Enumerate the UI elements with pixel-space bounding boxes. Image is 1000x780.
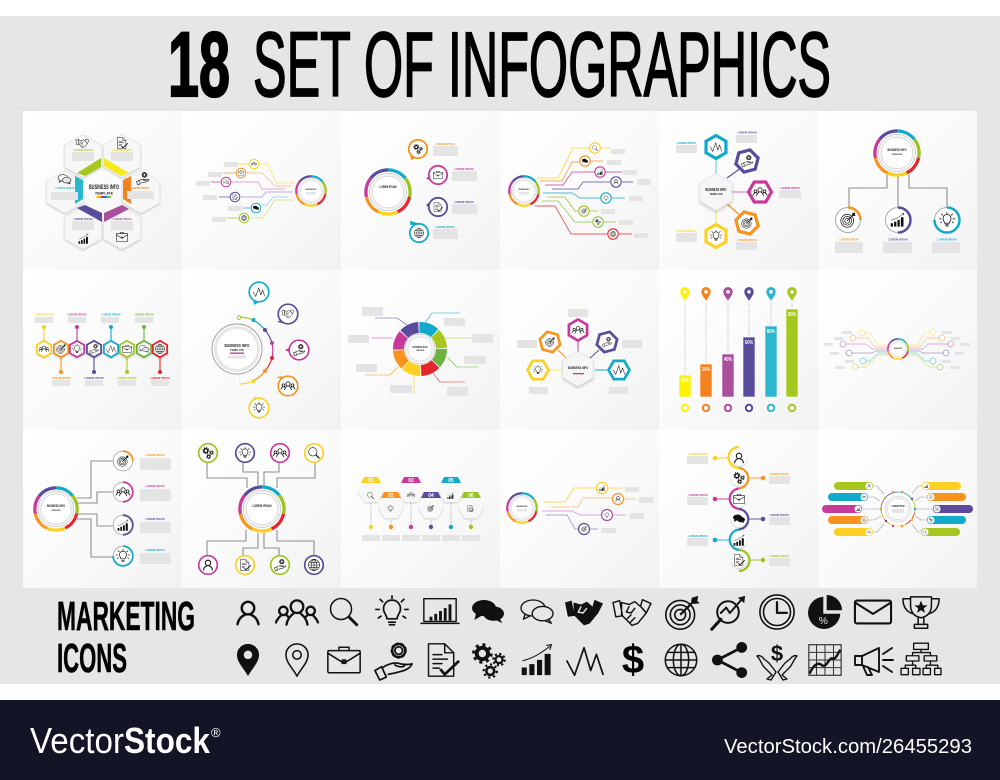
outer hexagons bbox=[706, 136, 774, 248]
small nodes bbox=[840, 329, 954, 370]
bubble icons bbox=[414, 144, 443, 238]
labels: LOREM IPSUM bbox=[146, 453, 165, 457]
centre title bbox=[568, 366, 588, 374]
labels: LOREM IPSUM bbox=[738, 238, 757, 242]
icon row: bottom: $ bbox=[622, 638, 644, 682]
donut centre: BUSINESS INFO bbox=[412, 345, 428, 349]
labels: LOREM IPSUM bbox=[781, 186, 800, 190]
big ring bbox=[875, 131, 919, 175]
labels: LOREM IPSUM bbox=[677, 141, 696, 145]
node icons bbox=[581, 485, 620, 532]
text blocks bbox=[824, 331, 970, 369]
labels: LOREM IPSUM bbox=[35, 312, 54, 316]
centre title bbox=[706, 187, 727, 196]
nodes bbox=[579, 143, 621, 239]
labels: LOREM IPSUM bbox=[889, 238, 908, 242]
labels: LOREM IPSUM bbox=[677, 229, 696, 233]
panel: hexagon hub with five spokes bbox=[659, 111, 818, 270]
panel: numbered hexagons bbox=[341, 430, 500, 588]
hexagons bbox=[355, 474, 487, 524]
panel: mirrored tech lines bbox=[818, 270, 977, 430]
spokes bbox=[550, 342, 608, 370]
big ring bbox=[509, 176, 539, 206]
labels: LOREM IPSUM bbox=[455, 200, 474, 204]
labels: LOREM IPSUM bbox=[52, 376, 71, 380]
labels: LOREM IPSUM bbox=[135, 312, 154, 316]
grey connectors bbox=[849, 174, 947, 207]
centre hexagon bbox=[563, 352, 593, 386]
segmented arc bbox=[239, 317, 273, 384]
step numbers: 01 bbox=[368, 478, 374, 484]
hexagon icons bbox=[367, 492, 474, 512]
labels bbox=[35, 312, 170, 386]
labels bbox=[140, 453, 171, 564]
big ring with dots bbox=[880, 491, 916, 527]
bottom dots bbox=[369, 525, 473, 529]
big ring bbox=[35, 488, 77, 530]
footer logo: Stock bbox=[124, 720, 211, 761]
labels bbox=[676, 130, 801, 250]
labels: LOREM IPSUM bbox=[146, 548, 165, 552]
hexagon text: LOREM IPSUM bbox=[74, 217, 93, 221]
dotted stems bbox=[371, 503, 471, 527]
donut segments bbox=[398, 328, 442, 370]
labels: LOREM IPSUM bbox=[151, 376, 170, 380]
step numbers: 03 bbox=[408, 478, 414, 484]
outer hexagons bbox=[525, 320, 632, 384]
node icons bbox=[116, 455, 130, 561]
spokes bbox=[716, 155, 750, 228]
panel: tech lines to ring, right side bbox=[182, 111, 341, 270]
panel: hexagon hub fan bbox=[500, 270, 659, 430]
nodes bbox=[221, 159, 261, 223]
stem dots bbox=[713, 456, 765, 562]
labels: LOREM IPSUM bbox=[738, 130, 757, 134]
panel: tech lines to ring, left side bbox=[500, 111, 659, 270]
bar values: 40% bbox=[724, 357, 732, 363]
hexagon text: LOREM IPSUM bbox=[113, 217, 132, 221]
pins bbox=[680, 287, 797, 301]
hexagon text: LOREM IPSUM bbox=[74, 148, 93, 152]
labels: LOREM IPSUM bbox=[102, 312, 121, 316]
connector lines bbox=[846, 332, 948, 367]
step numbers: 06 bbox=[468, 493, 474, 499]
left pills bbox=[822, 482, 873, 536]
donut centre bbox=[405, 334, 435, 364]
progress nodes bbox=[836, 208, 960, 232]
hexagon text bbox=[51, 148, 154, 230]
ring title: BUSINESS INFO bbox=[47, 504, 65, 508]
footer bar bbox=[0, 700, 1000, 780]
connector lines bbox=[542, 488, 636, 529]
grey connectors bbox=[862, 486, 933, 532]
labels: LOREM IPSUM bbox=[689, 493, 708, 497]
labels: LOREM IPSUM bbox=[118, 376, 137, 380]
connector lines bbox=[535, 148, 633, 234]
centre title: TEMPLATE bbox=[230, 348, 244, 352]
text blocks bbox=[362, 535, 480, 541]
big ring with dots: LOREM IPSUM bbox=[892, 505, 904, 508]
text blocks bbox=[196, 162, 242, 222]
labels: LOREM IPSUM bbox=[436, 142, 455, 146]
panel: ring with progress rows bbox=[23, 430, 182, 588]
labels: LOREM IPSUM bbox=[689, 452, 708, 456]
white icon discs bbox=[731, 450, 747, 568]
labels: LOREM IPSUM bbox=[455, 167, 474, 171]
centre title: BUSINESS INFO bbox=[706, 187, 727, 192]
target dots bbox=[682, 405, 795, 411]
centre title: TEMPLATE bbox=[710, 192, 723, 196]
hexagon text: LOREM IPSUM bbox=[56, 186, 75, 190]
footer id: VectorStock.com/26455293 bbox=[724, 736, 972, 758]
ring title: BUSINESS INFO bbox=[888, 148, 907, 152]
big ring bbox=[296, 176, 326, 206]
step numbers: 04 bbox=[428, 493, 434, 499]
grey connectors bbox=[77, 461, 113, 557]
six white hexagons bbox=[46, 134, 160, 250]
progress nodes bbox=[113, 451, 133, 566]
labels: LOREM IPSUM bbox=[689, 534, 708, 538]
ring label: LOREM IPSUM bbox=[380, 185, 397, 189]
text blocks bbox=[601, 149, 651, 238]
pill discs bbox=[854, 482, 941, 536]
big ring bbox=[240, 487, 284, 531]
centre title: BUSINESS INFO bbox=[568, 366, 588, 370]
step numbers bbox=[368, 478, 474, 499]
heading: marketing icons bbox=[57, 593, 195, 681]
nodes bbox=[199, 444, 323, 574]
panel: bar chart with pins bbox=[659, 270, 818, 430]
node icons bbox=[841, 212, 955, 227]
centre title: BUSINESS INFO bbox=[89, 185, 119, 191]
labels: LOREM IPSUM bbox=[770, 472, 789, 476]
bubbles bbox=[409, 140, 447, 242]
big ring bbox=[366, 170, 410, 214]
labels: LOREM IPSUM bbox=[770, 513, 789, 517]
right pills bbox=[921, 482, 973, 536]
footer logo: Vector bbox=[30, 720, 124, 761]
nodes bbox=[578, 482, 624, 534]
panel: hexagon cycle bbox=[23, 111, 182, 270]
icon row: bottom bbox=[237, 638, 941, 682]
ring title bbox=[518, 189, 530, 194]
centre title: TEMPLATE bbox=[95, 192, 114, 196]
panel: segmented donut bbox=[341, 270, 500, 430]
ring title bbox=[306, 189, 317, 194]
bubble icons bbox=[253, 288, 305, 412]
dotted leader lines bbox=[685, 302, 792, 375]
text blocks bbox=[601, 487, 653, 533]
labels bbox=[433, 142, 477, 239]
heading: marketing icons: ICONS bbox=[57, 635, 127, 681]
panel: ring with four bubbles bbox=[341, 111, 500, 270]
hexagon text: LOREM IPSUM bbox=[113, 148, 132, 152]
ring title bbox=[888, 148, 907, 156]
text blocks bbox=[348, 307, 493, 396]
hexagon text: LOREM IPSUM bbox=[131, 186, 150, 190]
bubbles bbox=[249, 282, 309, 418]
panel: serpentine timeline bbox=[659, 430, 818, 588]
panel: ring with coloured pills bbox=[818, 430, 977, 588]
labels: LOREM IPSUM bbox=[840, 238, 859, 242]
panel: hub with eight nodes bbox=[182, 430, 341, 588]
labels: LOREM IPSUM bbox=[85, 376, 104, 380]
labels: LOREM IPSUM bbox=[68, 312, 87, 316]
connector lines bbox=[211, 164, 295, 218]
ring title: BUSINESS INFO bbox=[516, 506, 528, 508]
step numbers: 02 bbox=[388, 493, 394, 499]
ring title bbox=[516, 506, 528, 512]
centre ring bbox=[888, 339, 908, 359]
panel: hexagon timeline bbox=[23, 270, 182, 430]
labels bbox=[835, 238, 960, 253]
ring title bbox=[47, 504, 65, 512]
stem dots bbox=[42, 325, 162, 374]
coloured step bands bbox=[75, 158, 131, 222]
bar values: 60% bbox=[745, 340, 753, 346]
labels: LOREM IPSUM bbox=[938, 238, 957, 242]
panel: org ring with three nodes bbox=[818, 111, 977, 270]
centre title: BUSINESS INFO bbox=[224, 343, 250, 348]
centre title bbox=[89, 185, 119, 198]
footer logo bbox=[30, 720, 221, 761]
ring title: BUSINESS INFO bbox=[518, 189, 530, 191]
centre hexagon bbox=[700, 174, 732, 210]
hexagon icons bbox=[39, 344, 165, 354]
panel: ring with four lines bbox=[500, 430, 659, 588]
ring title: BUSINESS INFO bbox=[894, 348, 902, 350]
central circle bbox=[212, 324, 262, 374]
icon row: top bbox=[238, 595, 939, 629]
labels: LOREM IPSUM bbox=[146, 517, 165, 521]
hexagons bbox=[37, 341, 167, 357]
arc dots bbox=[237, 316, 274, 383]
stems bbox=[715, 458, 763, 560]
bar values bbox=[681, 312, 796, 384]
donut connectors bbox=[365, 313, 478, 394]
node icons bbox=[581, 145, 618, 237]
title bbox=[168, 14, 831, 116]
ring label: LOREM IPSUM bbox=[252, 504, 272, 508]
icons bbox=[733, 453, 745, 565]
bar values: 90% bbox=[788, 312, 796, 318]
labels: LOREM IPSUM bbox=[146, 484, 165, 488]
node icons bbox=[203, 447, 320, 571]
big ring bbox=[507, 493, 537, 523]
labels: LOREM IPSUM bbox=[770, 554, 789, 558]
heading: marketing icons: MARKETING bbox=[57, 593, 195, 639]
centre title bbox=[224, 343, 250, 358]
labels bbox=[687, 452, 790, 566]
bars bbox=[679, 309, 798, 397]
labels: LOREM IPSUM bbox=[436, 225, 455, 229]
outer icons bbox=[710, 143, 767, 240]
step numbers: 05 bbox=[448, 478, 454, 484]
pill icons bbox=[856, 484, 939, 534]
coloured number caps bbox=[361, 477, 481, 498]
hexagon icons bbox=[58, 138, 149, 244]
footer logo: ® bbox=[211, 725, 221, 740]
bar values: 30% bbox=[702, 367, 710, 373]
outer icons bbox=[533, 326, 625, 374]
ring title: TEMPLATE bbox=[892, 153, 902, 156]
serpentine arcs bbox=[728, 447, 750, 571]
title: 18 bbox=[168, 14, 230, 116]
text blocks bbox=[517, 309, 642, 394]
node icons bbox=[223, 162, 259, 221]
bar values: 20% bbox=[681, 378, 689, 384]
ring title: BUSINESS INFO bbox=[306, 189, 317, 191]
ring title: TEMPLATE bbox=[52, 509, 61, 512]
panel: arc with speech bubbles bbox=[182, 270, 341, 430]
stems bbox=[44, 327, 160, 372]
grey connectors bbox=[207, 463, 315, 555]
bar values: 80% bbox=[767, 329, 775, 335]
donut centre: TEMPLATE bbox=[416, 349, 424, 352]
